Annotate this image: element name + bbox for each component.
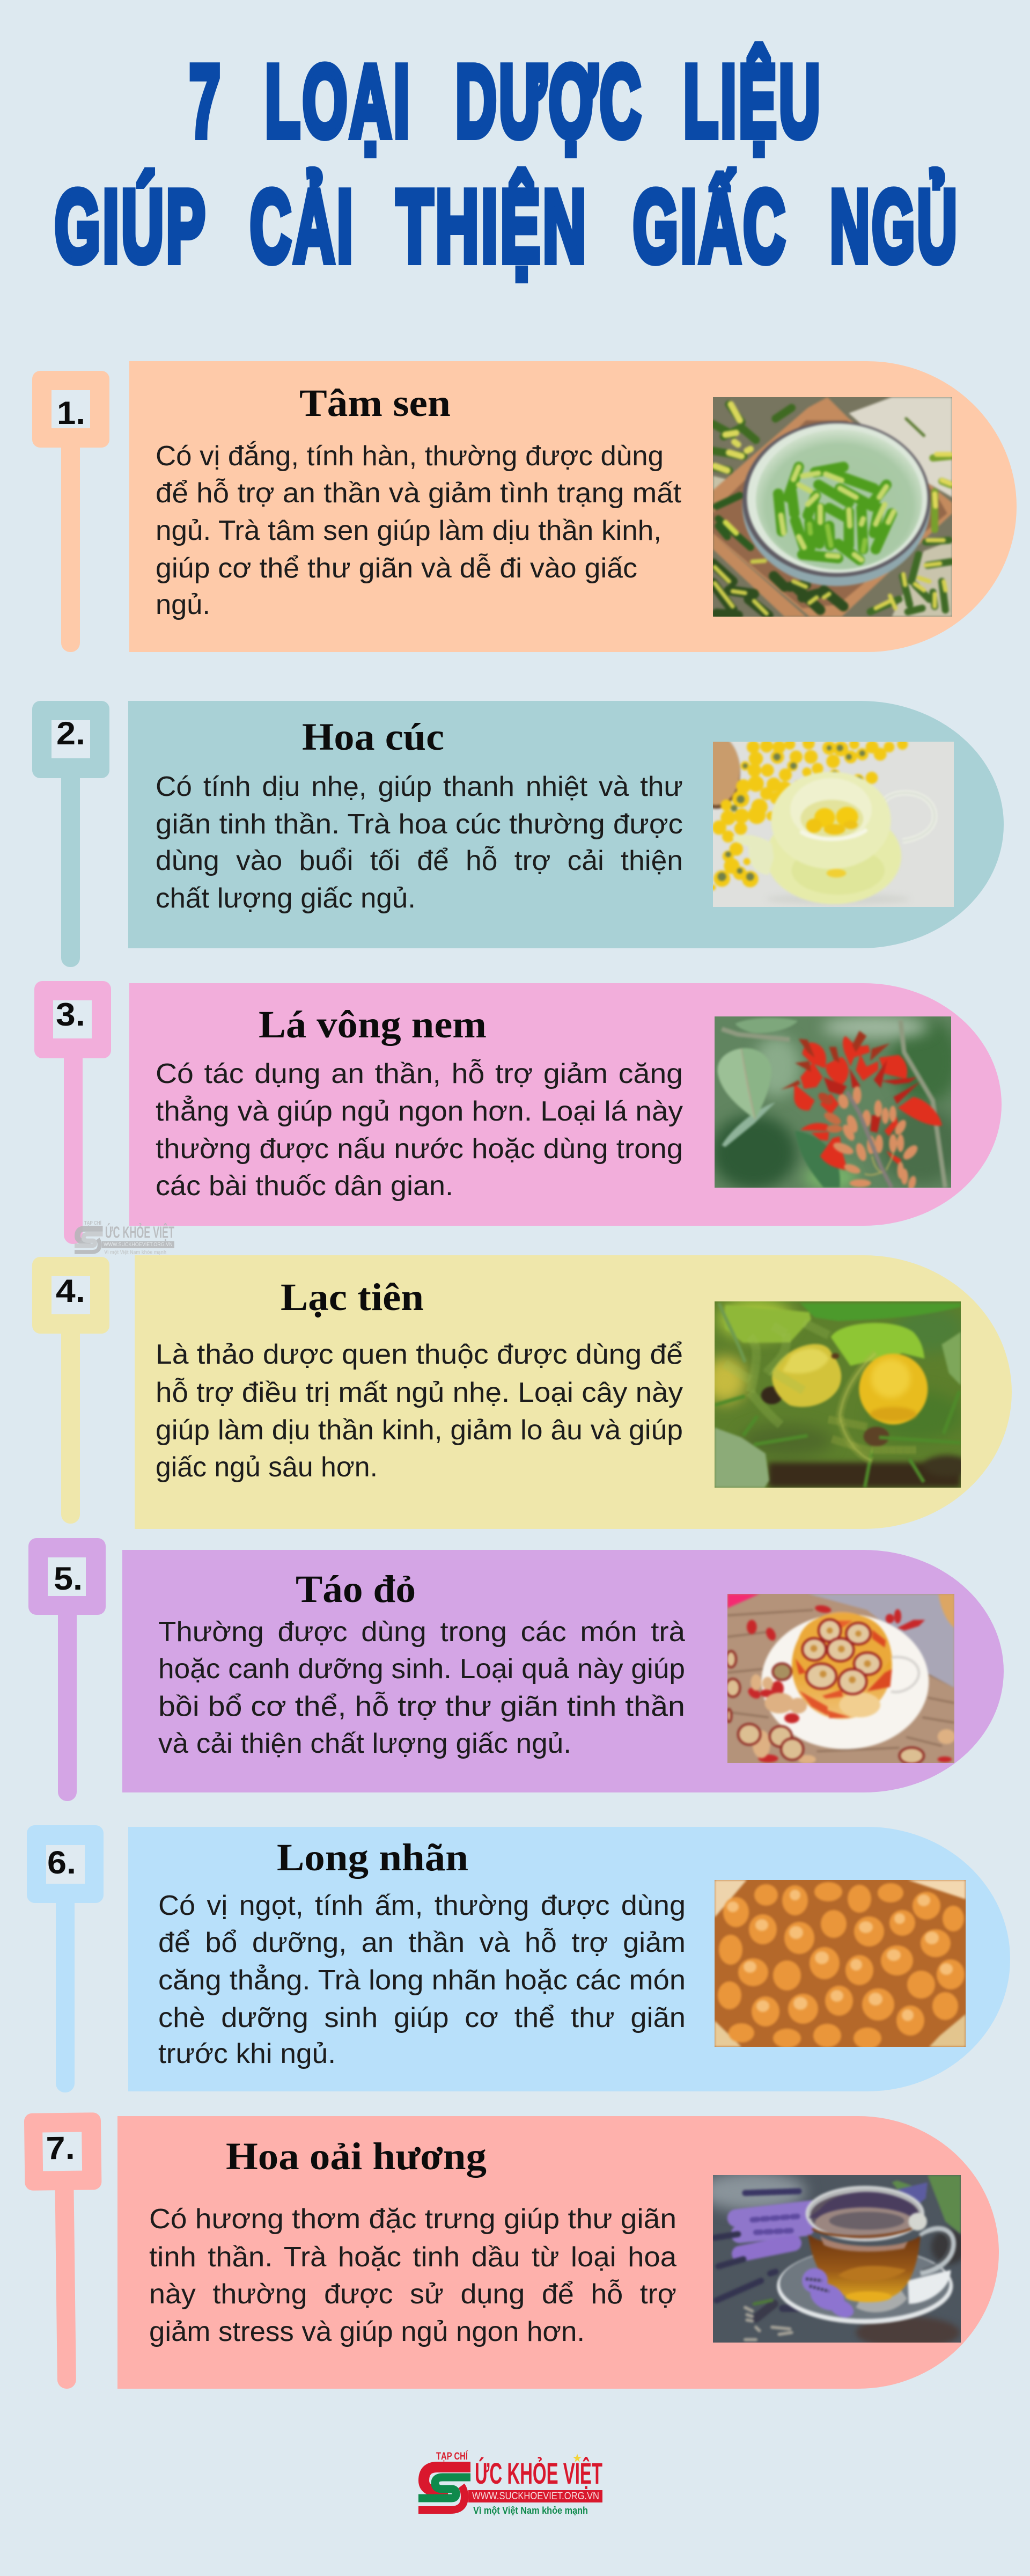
description 6: để bổ dưỡng, an thần và hỗ trợ giảm <box>158 1927 686 1958</box>
logo: Sức Khỏe Việt: ỨC KHỎE VIỆT <box>475 2456 602 2490</box>
description 1: ngủ. <box>156 589 210 620</box>
description 1: ngủ. Trà tâm sen giúp làm dịu thần kinh, <box>156 515 661 546</box>
description 6: căng thẳng. Trà long nhãn hoặc các món <box>158 1964 686 1996</box>
badge and stem 4 <box>32 1257 109 1524</box>
description 4: Là thảo dược quen thuộc được dùng để <box>156 1339 683 1370</box>
title: THIỆN <box>396 170 588 283</box>
panel: 3 Lá vông nem <box>34 981 1002 1244</box>
description 1 <box>156 441 682 620</box>
description 6: chè dưỡng sinh giúp cơ thể thư giãn <box>158 2002 686 2033</box>
description 2: dùng vào buổi tối để hỗ trợ cải thiện <box>156 845 683 876</box>
card background 7 <box>117 2116 999 2389</box>
description 3: Có tác dụng an thần, hỗ trợ giảm căng <box>156 1058 683 1089</box>
badge and stem 6 <box>27 1825 104 2092</box>
watermark logo <box>75 1219 174 1256</box>
badge and stem 7: 7. <box>46 2130 75 2166</box>
description 5: bồi bổ cơ thể, hỗ trợ thư giãn tinh thần <box>158 1691 685 1722</box>
description 5: hoặc canh dưỡng sinh. Loại quả này giúp <box>158 1653 685 1685</box>
card background 1 <box>129 361 1017 652</box>
heading: Tâm sen: Tâm sen <box>299 382 451 425</box>
watermark logo: ỨC KHỎE VIỆT <box>105 1223 174 1241</box>
watermark logo: WWW.SUCKHOEVIET.ORG.VN <box>104 1242 173 1248</box>
card background 5 <box>122 1550 1004 1792</box>
panel: 5 Táo đỏ <box>28 1538 1004 1801</box>
heading: Lạc tiên: Lạc tiên <box>281 1276 424 1319</box>
description 6 <box>158 1890 686 2069</box>
description 5: và cải thiện chất lượng giấc ngủ. <box>158 1728 571 1759</box>
logo: Sức Khỏe Việt <box>418 2450 602 2516</box>
heading: Long nhãn: Long nhãn <box>277 1836 468 1879</box>
logo: Sức Khỏe Việt: Vì một Việt Nam khỏe mạnh <box>473 2505 588 2516</box>
badge and stem 5: 5. <box>54 1561 83 1597</box>
panel: 6 Long nhãn <box>27 1825 1010 2092</box>
description 2: giãn tinh thần. Trà hoa cúc thường được <box>156 809 683 840</box>
panel: 7 Hoa oải hương <box>24 2112 999 2389</box>
description 2: chất lượng giấc ngủ. <box>156 883 416 914</box>
description 2: Có tính dịu nhẹ, giúp thanh nhiệt và thư <box>156 771 683 802</box>
title: GIÚP <box>55 170 208 283</box>
badge and stem 5 <box>28 1538 106 1801</box>
heading: Lá vông nem: Lá vông nem <box>259 1003 487 1046</box>
image: dried longan <box>715 1880 966 2047</box>
description 6: Có vị ngọt, tính ấm, thường được dùng <box>158 1890 686 1921</box>
description 4: hỗ trợ điều trị mất ngủ nhẹ. Loại cây này <box>156 1377 683 1408</box>
heading: Hoa cúc: Hoa cúc <box>302 715 444 758</box>
description 3 <box>156 1058 683 1202</box>
title: LOẠI <box>265 45 412 158</box>
badge and stem 7 <box>24 2112 104 2389</box>
description 7: Có hương thơm đặc trưng giúp thư giãn <box>149 2204 676 2235</box>
badge and stem 2 <box>32 701 109 967</box>
image: passion fruit <box>715 1301 961 1488</box>
description 1: để hỗ trợ an thần và giảm tình trạng mất <box>156 478 682 509</box>
image: lotus heart tea bowl <box>713 397 952 617</box>
image: coral tree red flowers <box>715 1016 951 1188</box>
panel: 1 Tâm sen <box>32 361 1017 652</box>
logo: Sức Khỏe Việt: WWW.SUCKHOEVIET.ORG.VN <box>472 2491 599 2502</box>
title: DƯỢC <box>455 45 643 158</box>
badge and stem 3: 3. <box>56 997 85 1033</box>
badge and stem 4: 4. <box>56 1273 85 1309</box>
description 1: giúp cơ thể thư giãn và dễ đi vào giấc <box>156 553 637 584</box>
description 3: các bài thuốc dân gian. <box>156 1170 453 1202</box>
title: CẢI <box>250 170 355 283</box>
badge and stem 2: 2. <box>56 715 85 751</box>
description 4: giấc ngủ sâu hơn. <box>156 1452 378 1483</box>
description 5: Thường được dùng trong các món trà <box>158 1616 685 1648</box>
card background 6 <box>128 1827 1010 2091</box>
card background 2 <box>128 701 1004 948</box>
description 4 <box>156 1339 683 1483</box>
description 7: giảm stress và giúp ngủ ngon hơn. <box>149 2316 585 2347</box>
heading: Hoa oải hương: Hoa oải hương <box>226 2135 487 2178</box>
description 3: thẳng và giúp ngủ ngon hơn. Loại lá này <box>156 1095 683 1127</box>
badge and stem 6: 6. <box>47 1845 76 1880</box>
panel: 4 Lạc tiên <box>32 1255 1012 1529</box>
image: lavender tea <box>713 2175 961 2343</box>
description 3: thường được nấu nước hoặc dùng trong <box>156 1133 683 1165</box>
image: chrysanthemum tea pot <box>713 742 954 907</box>
title: 7 <box>189 45 223 158</box>
description 1: Có vị đắng, tính hàn, thường được dùng <box>156 441 664 472</box>
description 7 <box>149 2204 676 2347</box>
panel: 2 Hoa cúc <box>32 701 1004 967</box>
logo: Sức Khỏe Việt: TẠP CHÍ <box>436 2450 468 2462</box>
description 7: này thường được sử dụng để hỗ trợ <box>149 2279 676 2310</box>
image: red date tea <box>727 1594 954 1763</box>
description 4: giúp làm dịu thần kinh, giảm lo âu và giúp <box>156 1415 683 1446</box>
card background 4 <box>135 1255 1012 1529</box>
description 7: tinh thần. Trà hoặc tinh dầu từ loại hoa <box>149 2242 676 2273</box>
badge and stem 3 <box>34 981 111 1244</box>
title: GIẤC <box>633 170 788 283</box>
watermark logo: Vì một Việt Nam khỏe mạnh <box>104 1250 166 1256</box>
watermark logo: TẠP CHÍ <box>84 1219 102 1226</box>
description 5 <box>158 1616 685 1759</box>
heading: Táo đỏ: Táo đỏ <box>296 1568 416 1611</box>
title: LIỆU <box>683 45 822 158</box>
description 2 <box>156 771 683 914</box>
badge and stem 1 <box>32 371 109 652</box>
title <box>55 45 959 283</box>
description 6: trước khi ngủ. <box>158 2038 336 2069</box>
card background 3 <box>129 983 1002 1226</box>
badge and stem 1: 1. <box>57 395 85 431</box>
